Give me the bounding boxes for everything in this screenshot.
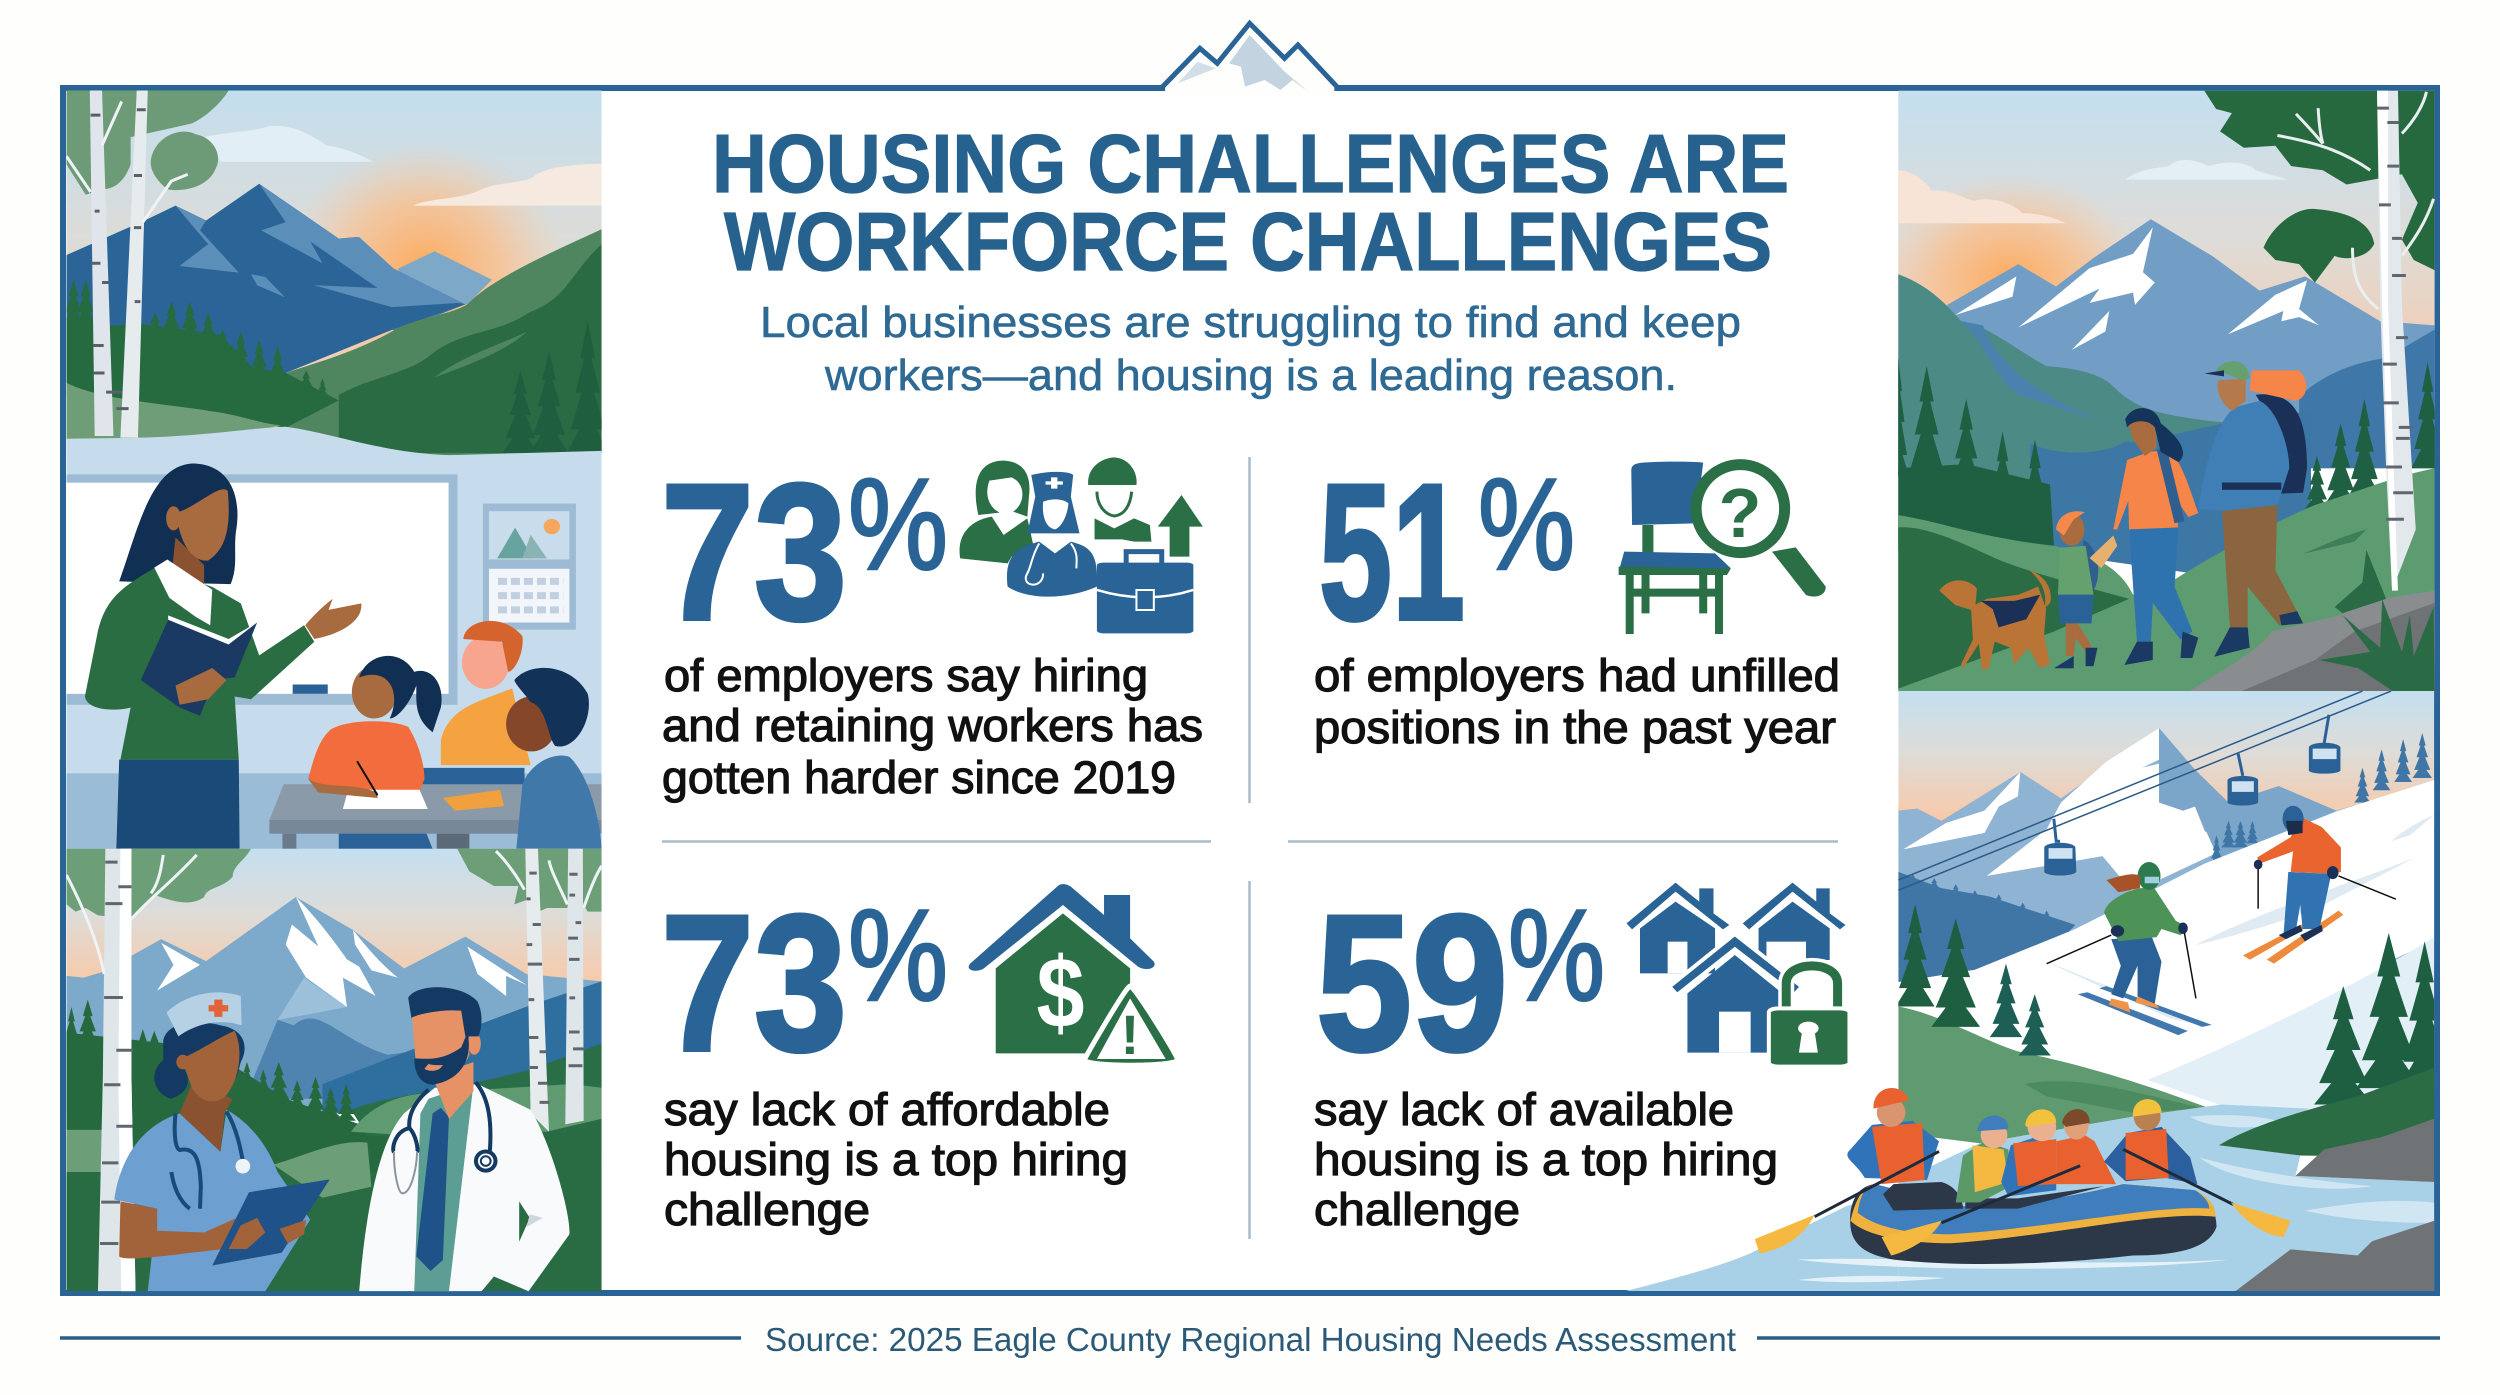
source footer: Source: 2025 Eagle County Regional Housing Needs Assessment — [765, 1321, 1736, 1358]
panel: nurse and doctor in mountains — [62, 849, 602, 1291]
text: 59% available housing description: challenge — [1314, 1184, 1520, 1235]
stat: 51% unfilled positions: 51 — [1319, 444, 1465, 661]
text: 73% affordable housing description — [664, 1084, 1128, 1235]
text: 73% hiring harder description: gotten harder since 2019 — [662, 752, 1176, 803]
mountain emblem on top of frame — [1162, 23, 1337, 97]
stat: 73% hiring harder: % — [848, 451, 948, 597]
divider lines — [662, 457, 1838, 1239]
whitewater raft with paddlers — [1755, 1088, 2291, 1264]
text: 51% unfilled positions description: of employers had unfilled — [1314, 650, 1840, 701]
icon: house with dollar and warning — [969, 884, 1178, 1066]
text: 59% available housing description: say lack of available — [1314, 1084, 1734, 1135]
icon: house with dollar and warning: $ — [1036, 937, 1084, 1049]
stat: 73% affordable housing — [661, 875, 1178, 1092]
stat: 51% unfilled positions: % — [1478, 451, 1575, 597]
title — [712, 117, 1789, 288]
stat: 73% hiring harder: 73 — [661, 444, 847, 661]
doctor — [359, 987, 570, 1291]
title: WORKFORCE CHALLENGES — [724, 195, 1772, 288]
wall calendar — [483, 503, 576, 630]
nurse — [114, 992, 330, 1291]
rocks and grass — [2188, 550, 2435, 692]
classroom whiteboard — [67, 474, 602, 850]
text: 73% affordable housing description: housing is a top hiring — [664, 1134, 1128, 1185]
title: HOUSING CHALLENGES ARE — [712, 117, 1789, 210]
panel: family hiking in mountains — [1876, 91, 2444, 692]
birch tree and leaves — [2204, 91, 2435, 591]
panel: skiers, gondolas and river — [1626, 691, 2451, 1291]
text: 59% available housing description: housing is a top hiring — [1314, 1134, 1778, 1185]
icon: empty chair and magnifier: ? — [1719, 474, 1761, 552]
teacher — [85, 463, 361, 849]
birch trees and leaves — [67, 90, 229, 438]
skier in green — [2047, 862, 2212, 1035]
stat: 73% hiring harder — [661, 444, 1203, 661]
stat: 51% unfilled positions — [1319, 444, 1826, 661]
table and books — [269, 768, 602, 850]
dog — [1939, 569, 2051, 670]
panel: mountain landscape and classroom teacher — [60, 90, 609, 850]
text: 51% unfilled positions description — [1314, 650, 1840, 753]
stat: 73% affordable housing: % — [848, 882, 948, 1028]
icon: houses and padlock — [1627, 883, 1849, 1067]
text: 73% affordable housing description: challenge — [664, 1184, 870, 1235]
subtitle: workers—and housing is a leading reason. — [824, 351, 1677, 400]
text: 73% hiring harder description — [662, 650, 1203, 803]
stat: 59% available housing — [1316, 875, 1849, 1092]
icon: house with dollar and warning: ! — [1121, 1003, 1139, 1066]
skier in orange — [2243, 806, 2396, 964]
text: 73% hiring harder description: and retaining workers has — [662, 700, 1203, 751]
stat: 73% affordable housing: 73 — [661, 875, 847, 1092]
ski lift with gondolas — [1898, 691, 2391, 890]
text: 59% available housing description — [1314, 1084, 1778, 1235]
stat: 59% available housing: 59 — [1316, 875, 1508, 1092]
hiker with backpack — [2198, 361, 2307, 657]
student: red-haired boy — [441, 621, 531, 765]
woman hiker — [2113, 408, 2198, 665]
student: girl — [308, 656, 442, 798]
text: 73% affordable housing description: say lack of affordable — [664, 1084, 1110, 1135]
birch trees and leaves — [67, 849, 602, 1291]
subtitle: Local businesses are struggling to find and keep — [760, 298, 1741, 347]
icon: empty chair and magnifier — [1619, 462, 1826, 634]
text: 51% unfilled positions description: positions in the past year — [1314, 702, 1836, 753]
subtitle — [760, 298, 1741, 400]
student: dark-haired boy — [506, 668, 602, 849]
river water spilling past the panel — [1626, 1190, 1898, 1291]
text: 73% hiring harder description: of employers say hiring — [664, 650, 1148, 701]
stat: 59% available housing: % — [1508, 882, 1605, 1028]
child hiker — [2054, 511, 2117, 668]
icon: workers, arrow and briefcase — [960, 457, 1203, 633]
